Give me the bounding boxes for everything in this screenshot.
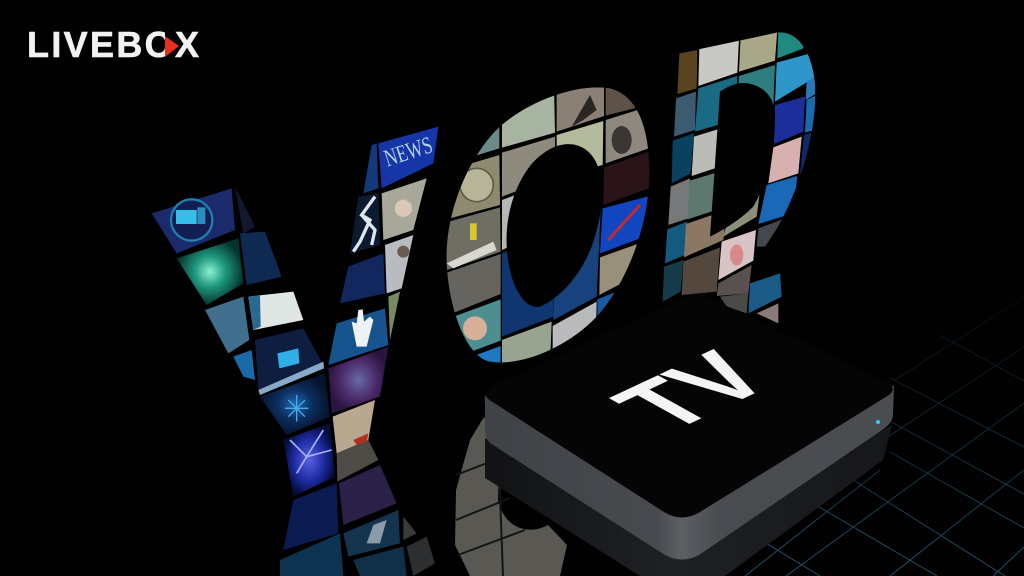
letter O tiles: [440, 83, 653, 370]
logo O cut-out: [165, 30, 175, 60]
tile: white device: [248, 292, 303, 330]
tile: blue red arrow: [600, 196, 648, 254]
box base: [485, 425, 892, 576]
tile: dark suit photo: [557, 83, 604, 132]
tile: reflected hand: [343, 510, 400, 557]
reflection of the O on the floor: [455, 417, 567, 576]
tile: blue burst: [283, 423, 335, 497]
status light: [876, 420, 880, 424]
tile: green network: [177, 238, 243, 305]
tile: purple globe: [328, 347, 388, 413]
TV lettering: TV: [589, 338, 795, 444]
logo: LIVEBOX: LIVEBOX: [27, 24, 199, 65]
tile: star: [260, 373, 330, 435]
tile: crosswalk photo: [446, 207, 501, 270]
tile: clock photo: [451, 155, 500, 218]
box front side: [485, 386, 894, 560]
letter D tiles: [663, 30, 817, 302]
tile: blue screen orbit: [255, 328, 324, 395]
tile: family photo: [382, 178, 427, 240]
box top face: [486, 294, 893, 518]
tile: news: NEWS: [381, 131, 436, 172]
D centre hole: [710, 83, 775, 237]
tile: grey portrait: [606, 110, 648, 164]
tile: pink figure: [718, 230, 756, 280]
O centre hole: [507, 144, 602, 307]
floor grid: [720, 297, 1024, 576]
tile: surprised woman: [456, 300, 501, 351]
TV box: [485, 294, 894, 576]
tile: man photo: [385, 235, 413, 293]
reflection tiles of the D: [720, 273, 782, 323]
tile: molecule: [350, 193, 380, 253]
tile: device icon: [152, 188, 235, 253]
play triangle: [165, 36, 179, 57]
tile: white red photo: [333, 400, 378, 482]
tile: news: [378, 127, 438, 188]
letter V tiles: [152, 127, 438, 576]
tile: white hand: [328, 308, 388, 365]
